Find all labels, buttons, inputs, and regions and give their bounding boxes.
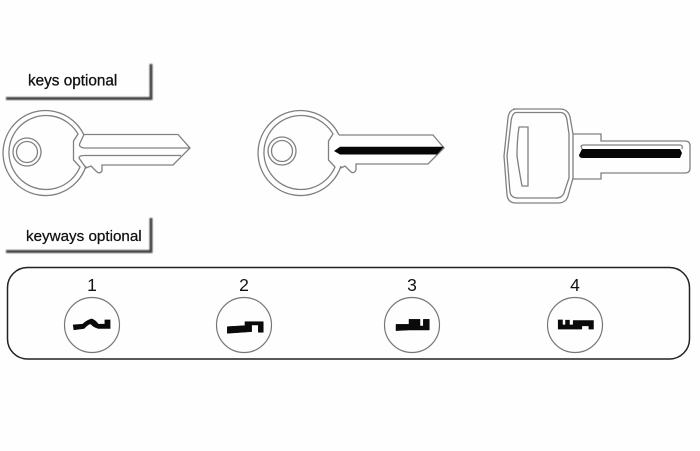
black groove — [579, 149, 682, 158]
keyway 4: 4 — [570, 275, 580, 295]
label: keys optional — [6, 64, 151, 98]
keyway 3: 3 — [407, 275, 417, 295]
keyway 3 — [384, 275, 440, 352]
label: keyways optional: keyways optional — [26, 228, 142, 245]
keyway 2 — [216, 275, 272, 352]
black groove — [334, 147, 444, 154]
label: keys optional: keys optional — [28, 72, 117, 90]
label: keyways optional — [6, 218, 151, 252]
key 3: square-head blank — [504, 109, 690, 203]
keyway 1: 1 — [87, 275, 97, 295]
panel: keyway options — [8, 268, 690, 359]
keyway 2: 2 — [239, 275, 249, 295]
keyway 1 — [64, 275, 120, 352]
keyway 4 — [548, 275, 602, 352]
key 1: plain blank — [3, 111, 190, 196]
key 2: black groove blank — [258, 111, 444, 196]
